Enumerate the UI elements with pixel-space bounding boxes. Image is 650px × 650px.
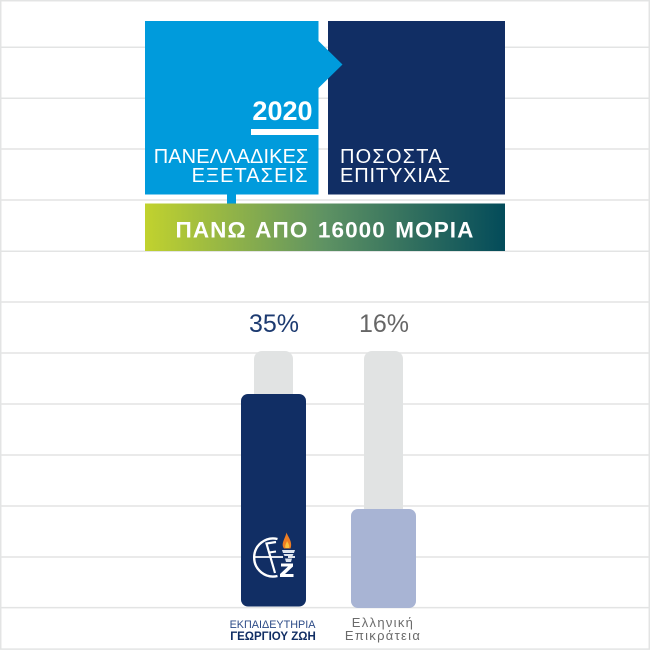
label: Greece: Επικράτεια: [345, 628, 421, 643]
success rate label: ΠΟΣΟΣΤΑ: [340, 146, 443, 168]
track: [254, 351, 293, 431]
banner text: ΠΑΝΩ ΑΠΟ 16000 ΜΟΡΙΑ: [175, 218, 475, 243]
icon: school logo with torch: [254, 532, 295, 577]
gradient banner: [145, 204, 505, 251]
exams label: ΠΑΝΕΛΛΑΔΙΚΕΣ: [154, 146, 308, 168]
blue box with arrow: [145, 21, 342, 204]
bar: Georgiou Zoi 35%: [241, 351, 306, 606]
year: 2020: [252, 96, 312, 126]
value: 16%: 16%: [359, 310, 409, 338]
exams label: ΕΞΕΤΑΣΕΙΣ: [192, 165, 308, 187]
label: school name: [230, 619, 316, 643]
panel: exams header: [145, 21, 505, 251]
track: [364, 351, 403, 541]
value: 35%: 35%: [249, 310, 299, 338]
label: school name: ΕΚΠΑΙΔΕΥΤΗΡΙΑ: [230, 619, 316, 631]
success rate label: ΕΠΙΤΥΧΙΑΣ: [340, 165, 451, 187]
year underline: [251, 129, 319, 135]
bar: Greece 16%: [351, 351, 416, 608]
value bar: [241, 394, 306, 606]
label: Greece: Ελληνική: [352, 615, 414, 630]
label: school name: ΓΕΩΡΓΙΟΥ ΖΩΗ: [230, 631, 316, 643]
navy box: [328, 21, 505, 194]
label: Greece: [345, 615, 421, 643]
value bar: [351, 509, 416, 608]
